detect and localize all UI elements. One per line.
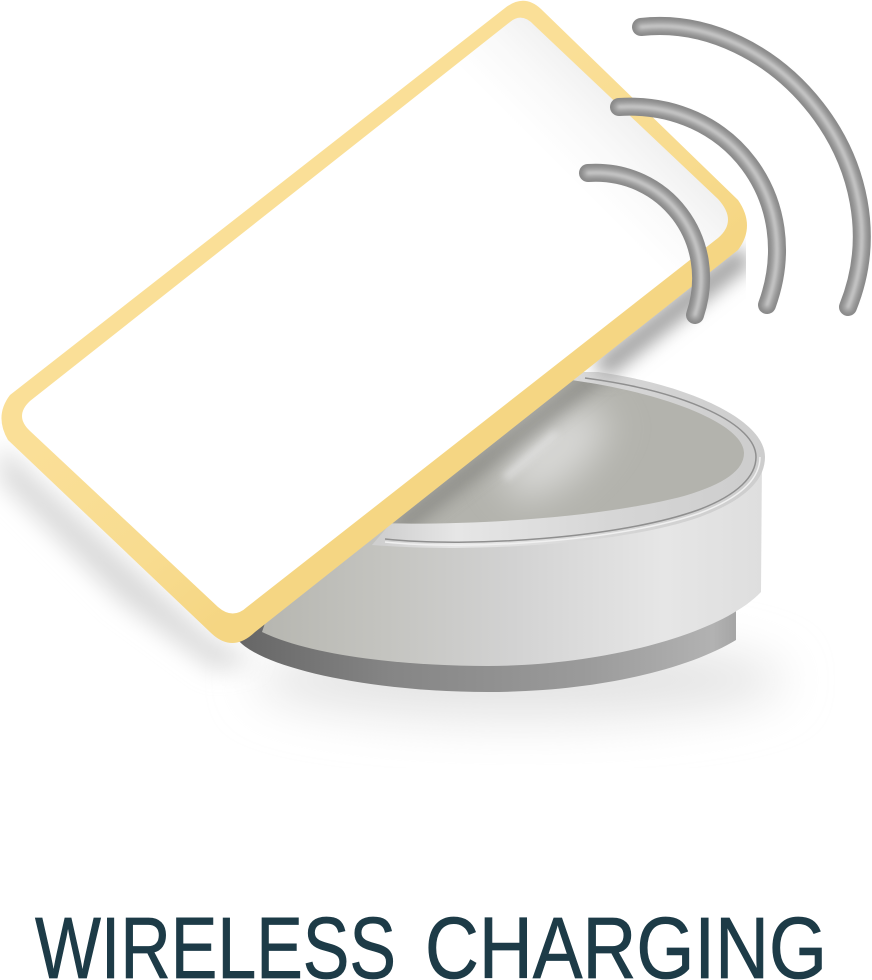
pad rim: [372, 372, 765, 548]
ground shadow: [0, 445, 785, 720]
phone screen: [22, 18, 728, 614]
phone frame: [1, 1, 747, 643]
inner wave: [588, 173, 701, 315]
pad inner bowl: [392, 380, 744, 524]
charging pad: [238, 360, 765, 692]
smartphone: [1, 1, 747, 643]
middle wave: [619, 107, 777, 305]
pad foot: [238, 600, 736, 692]
phone shadow on background: [600, 255, 745, 370]
title: [35, 900, 827, 980]
pad body: [262, 457, 762, 666]
outer wave: [641, 26, 862, 307]
rim groove: [385, 378, 756, 542]
signal waves: [588, 26, 862, 315]
